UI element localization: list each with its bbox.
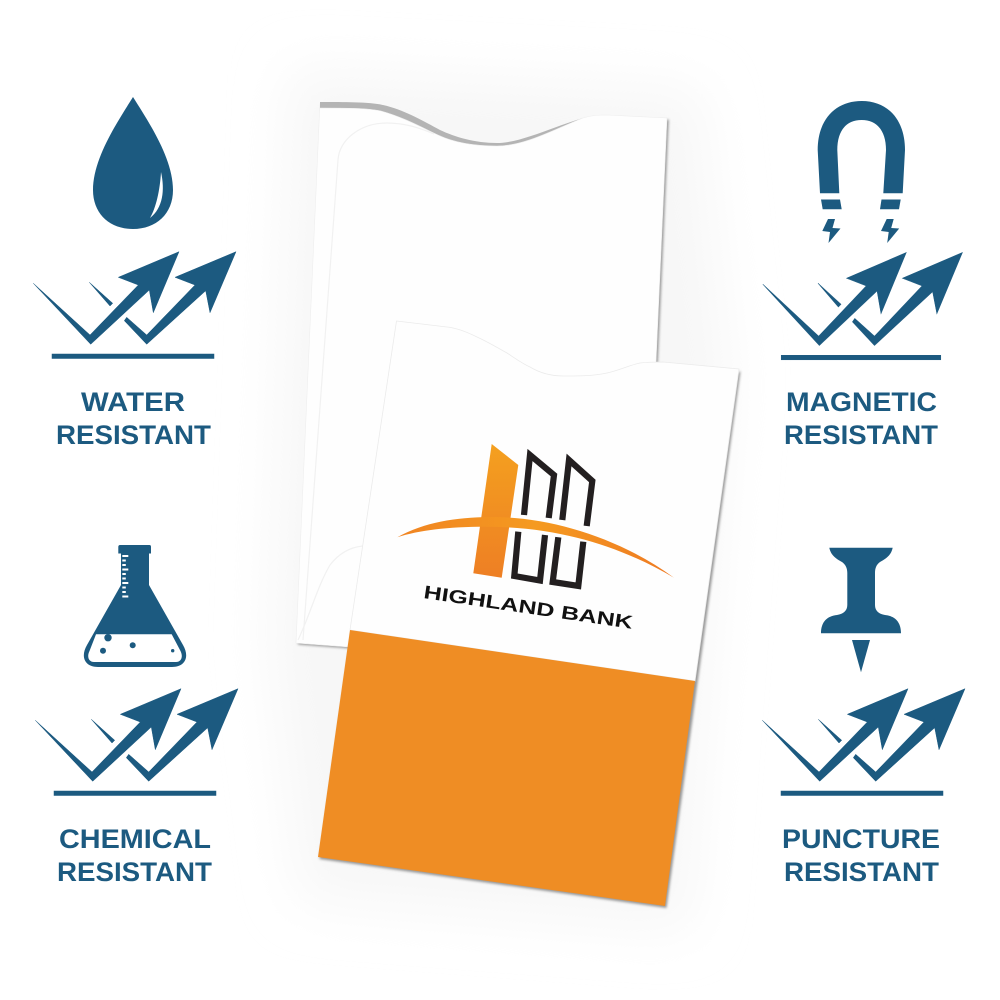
sleeve lower flap line [298, 546, 363, 640]
label: chemical resistant: CHEMICAL [59, 824, 211, 854]
label: water resistant [56, 387, 212, 450]
icon: flask [84, 545, 186, 667]
sleeve pocket fold line [303, 123, 434, 640]
sleeve white body [296, 108, 667, 647]
label: magnetic resistant [784, 387, 939, 450]
icon: resistance arrows [35, 689, 238, 796]
flask liquid window [88, 634, 182, 662]
sleeve orange lower band [318, 630, 695, 906]
panel: puncture resistant [762, 548, 965, 887]
label: chemical resistant: RESISTANT [57, 857, 213, 887]
sleeve white top [350, 321, 739, 681]
flask measuring ticks [122, 555, 128, 598]
logo orange arc [397, 517, 674, 578]
logo orange bar [473, 444, 518, 578]
logo wordmark: HIGHLAND BANK [422, 581, 635, 633]
icon: resistance arrows [33, 252, 236, 358]
label: puncture resistant: PUNCTURE [782, 824, 940, 854]
sleeve edge shadow [298, 120, 669, 648]
icon: resistance arrows [762, 689, 965, 796]
label: water resistant: RESISTANT [56, 420, 212, 450]
icon: resistance arrows [763, 252, 962, 360]
label: puncture resistant: RESISTANT [784, 857, 940, 887]
label: chemical resistant [57, 824, 213, 887]
label: magnetic resistant: MAGNETIC [786, 387, 937, 417]
panel: front card sleeve [318, 321, 740, 908]
label: puncture resistant [782, 824, 940, 887]
logo black buildings [514, 455, 592, 586]
icon: push pin [821, 548, 901, 672]
label: water resistant: WATER [81, 387, 185, 417]
icon: water drop [93, 97, 173, 229]
sleeve grey inner top band [319, 102, 583, 160]
flask bubbles [100, 634, 174, 654]
icon: drop highlight [150, 172, 163, 218]
panel: back card sleeve [296, 102, 669, 648]
panel: water resistant [33, 97, 236, 450]
icon: magnet [818, 101, 905, 243]
label: magnetic resistant: RESISTANT [784, 420, 939, 450]
panel: magnetic resistant [763, 101, 962, 450]
card edge shadow [320, 371, 740, 908]
panel: chemical resistant [35, 545, 238, 887]
logo: Highland Bank [397, 444, 674, 633]
